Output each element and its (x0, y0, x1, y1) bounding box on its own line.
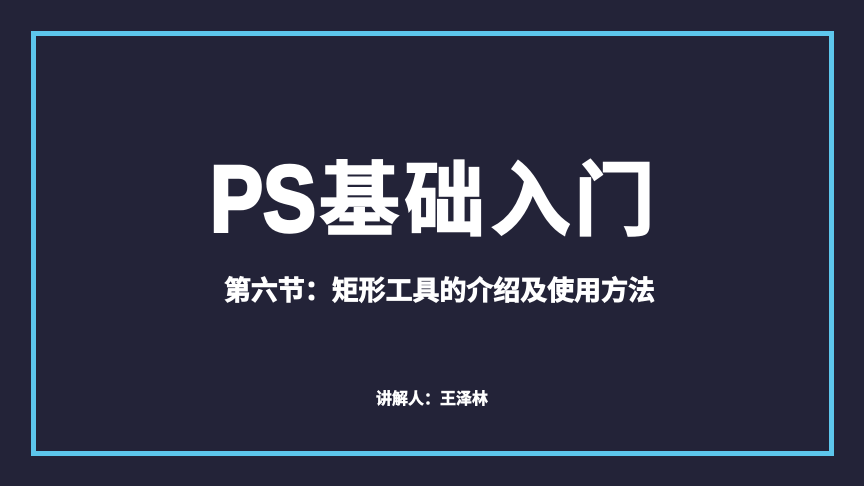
frame: cyan border (34, 34, 832, 454)
title: 基础入门 (319, 157, 655, 247)
title: PS (210, 146, 316, 251)
title (210, 146, 655, 251)
presenter: 讲解人：王泽林 (376, 389, 488, 408)
subtitle: 第六节：矩形工具的介绍及使用方法 (224, 275, 655, 306)
